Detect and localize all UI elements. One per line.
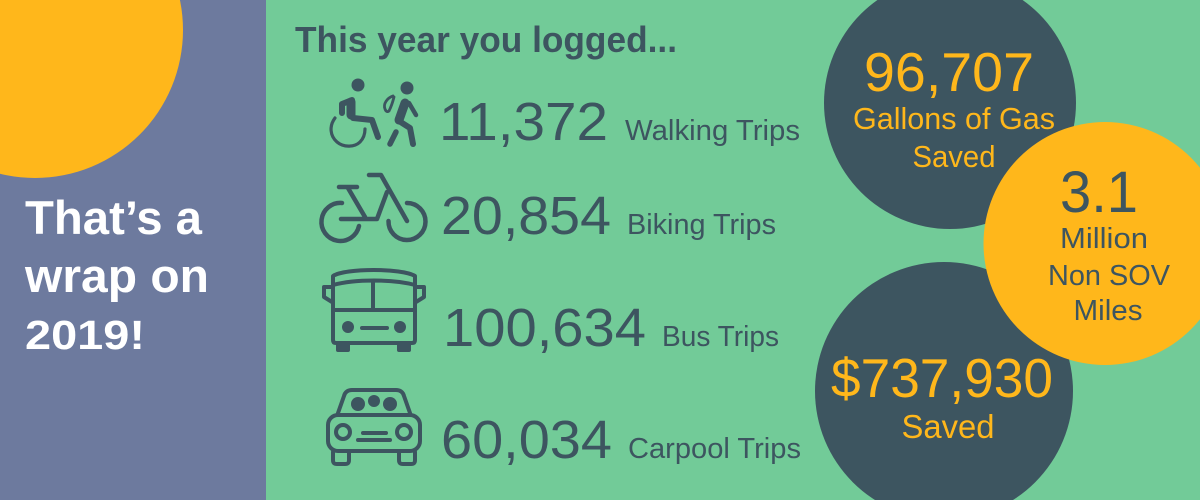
walking label: Walking Trips xyxy=(625,115,800,147)
panel heading: That’s a xyxy=(25,191,203,244)
circle: gallons saved: Saved xyxy=(912,139,996,174)
bus row xyxy=(324,270,779,358)
main heading: This year you logged... xyxy=(295,19,677,60)
icon: bicycle xyxy=(321,175,425,241)
decorative yellow sun circle xyxy=(0,0,183,178)
circle: money saved: Saved xyxy=(902,408,994,445)
carpool label: Carpool Trips xyxy=(628,433,801,465)
circle: money saved xyxy=(815,262,1073,500)
left panel xyxy=(0,0,266,500)
circle: gallons saved: 96,707 xyxy=(864,41,1034,103)
icon: car xyxy=(328,390,420,464)
circle: non SOV miles: Non SOV xyxy=(1048,260,1171,292)
circle: gallons saved xyxy=(824,0,1076,229)
biking label: Biking Trips xyxy=(627,209,776,241)
circle: non SOV miles: Miles xyxy=(1074,295,1142,327)
bus label: Bus Trips xyxy=(662,321,779,353)
biking row xyxy=(321,175,776,246)
walking count: 11,372 xyxy=(439,92,608,152)
panel heading: 2019! xyxy=(25,312,145,358)
circle: non SOV miles xyxy=(984,122,1200,365)
circle: money saved: $737,930 xyxy=(831,347,1053,409)
icon: bus xyxy=(324,270,424,352)
panel heading xyxy=(24,191,209,358)
walking row xyxy=(331,78,800,152)
circle: gallons saved: Gallons of Gas xyxy=(853,101,1055,136)
bus count: 100,634 xyxy=(443,298,646,358)
carpool row xyxy=(328,390,801,470)
circle: non SOV miles: Million xyxy=(1060,223,1148,255)
biking count: 20,854 xyxy=(441,186,611,246)
panel heading: wrap on xyxy=(24,249,209,302)
carpool count: 60,034 xyxy=(441,410,612,470)
circle: non SOV miles: 3.1 xyxy=(1060,160,1138,225)
icon: wheelchair and walker xyxy=(331,78,416,146)
